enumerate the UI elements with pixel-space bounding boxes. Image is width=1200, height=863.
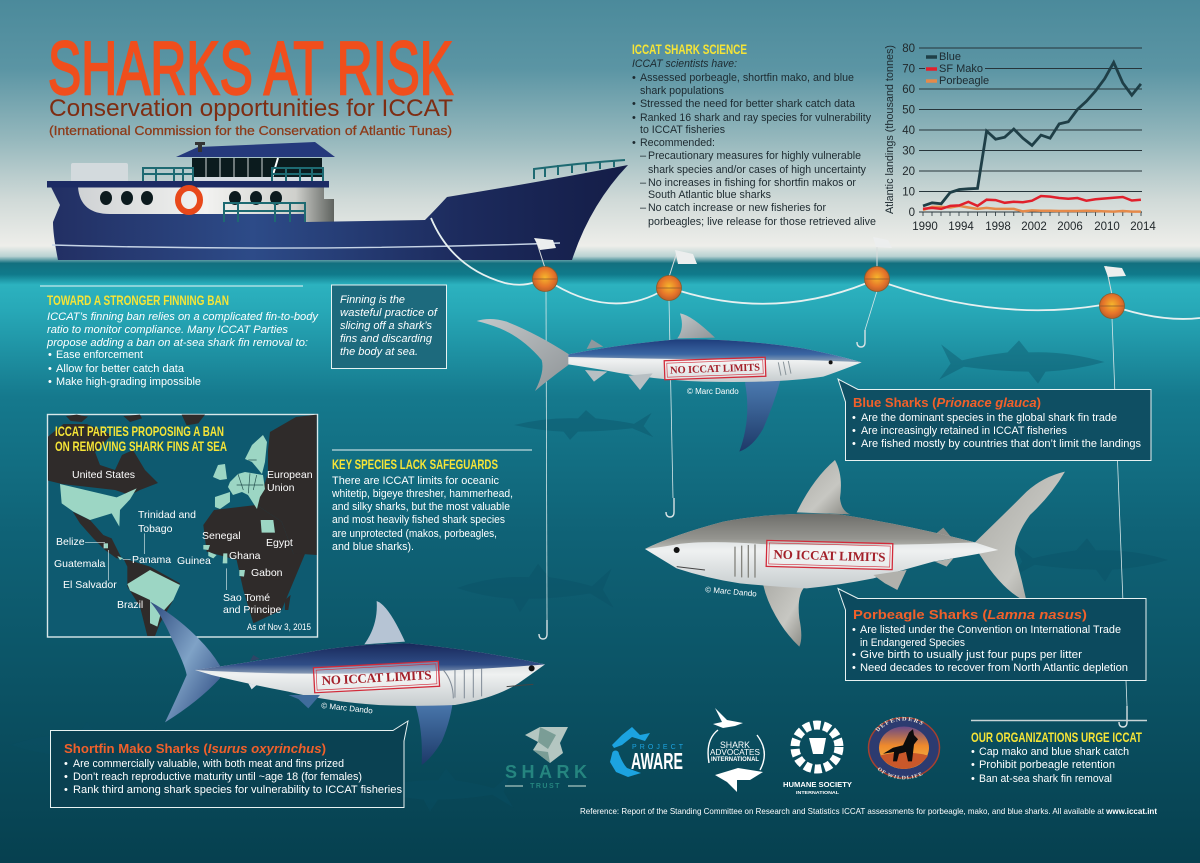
pectoral fin <box>762 575 805 647</box>
tail <box>975 472 1065 602</box>
logo: Defenders of Wildlife <box>868 716 940 780</box>
panel: map of ICCAT parties <box>48 414 318 637</box>
finning ban text: ICCAT’s finning ban relies on a complicated fin-to-body <box>47 311 320 323</box>
science text: Recommended: <box>640 137 715 149</box>
x axis labels: 2014 <box>1130 221 1156 233</box>
hull <box>51 165 628 260</box>
science text: Stressed the need for better shark catch data <box>640 98 856 110</box>
map labels: Senegal <box>202 530 241 542</box>
map heading <box>55 423 227 454</box>
finning ban text: • <box>48 363 52 375</box>
science text: porbeagles; live release for those retrieved alive <box>648 216 876 228</box>
logo: Shark Advocates International: ADVOCATES <box>710 748 760 757</box>
mouth <box>507 684 533 687</box>
commission name: (International Commission for the Conservation of Atlantic Tunas) <box>49 124 452 138</box>
panel: key species lack safeguards <box>331 450 532 553</box>
legend <box>926 51 989 87</box>
dorsal fin <box>677 313 715 338</box>
map labels: United States <box>72 469 135 481</box>
science text: – <box>640 177 647 189</box>
legend: SF Mako <box>939 63 983 75</box>
x axis labels: 2010 <box>1094 221 1120 233</box>
urge list: • <box>971 759 975 771</box>
mako facts: • <box>64 784 68 796</box>
mako facts: Don’t reach reproductive maturity until ~age 18 (for females) <box>73 771 362 783</box>
logo: Shark Trust: SHARK <box>505 762 587 782</box>
illustration: shortfin mako shark <box>150 601 545 765</box>
science text: shark species and/or cases of high uncertainty <box>648 164 866 176</box>
map labels <box>54 469 313 632</box>
blue shark facts: Are fished mostly by countries that don’t limit the landings <box>861 438 1141 450</box>
y axis labels: 10 <box>902 186 915 198</box>
branch lines <box>546 290 1127 706</box>
key species text: and silky sharks, but the most valuable <box>332 501 510 513</box>
mako facts: Rank third among shark species for vulnerability to ICCAT fisheries <box>73 784 403 796</box>
science text: • <box>632 112 636 124</box>
science text: • <box>632 72 636 84</box>
science text: ICCAT scientists have: <box>632 58 737 70</box>
lower fins <box>873 558 953 590</box>
blue shark facts: • <box>852 425 856 437</box>
science text: • <box>632 98 636 110</box>
blue shark title: Blue Sharks (Prionace glauca) <box>853 395 1041 410</box>
tail <box>477 319 570 391</box>
logo: Shark Advocates International: INTERNATIONAL <box>711 757 759 763</box>
map labels: and Principe <box>223 604 282 616</box>
stamp: no ICCAT limits: NO ICCAT LIMITS <box>321 667 432 688</box>
fishing boat <box>47 142 628 260</box>
callout: finning definition: Finning is the <box>340 294 405 306</box>
eye <box>829 360 833 364</box>
stamp: no ICCAT limits: NO ICCAT LIMITS <box>670 362 760 377</box>
map background <box>48 414 318 637</box>
science text: Precautionary measures for highly vulnerable <box>648 150 861 162</box>
panel: our organizations urge ICCAT <box>971 720 1147 785</box>
map labels: Ghana <box>229 550 261 562</box>
urge list: • <box>971 773 975 785</box>
legend: Blue <box>939 51 961 63</box>
mako facts: • <box>64 771 68 783</box>
body <box>568 339 862 382</box>
mako facts <box>64 758 403 796</box>
y axis labels <box>902 43 915 219</box>
wheelhouse <box>192 158 322 181</box>
y axis labels: 40 <box>902 125 915 137</box>
blue shark facts <box>852 412 1141 450</box>
eye <box>529 665 535 671</box>
map heading: ON REMOVING SHARK FINS AT SEA <box>55 438 227 454</box>
porbeagle facts <box>852 624 1128 674</box>
urge list <box>971 746 1129 785</box>
deck <box>47 181 329 188</box>
logo: Humane Society International: INTERNATIONAL <box>796 790 839 795</box>
second dorsal fin <box>935 528 952 538</box>
blue shark facts: Are the dominant species in the global shark fin trade <box>861 412 1117 424</box>
finning ban text: Allow for better catch data <box>56 363 185 375</box>
y axis title: Atlantic landings (thousand tonnes) <box>884 45 896 214</box>
line chart: Atlantic landings <box>884 43 1156 233</box>
proposing countries <box>60 484 137 527</box>
porbeagle facts: Need decades to recover from North Atlantic depletion <box>860 662 1128 674</box>
porbeagle title: Porbeagle Sharks ( Lamna nasus ) <box>853 607 1087 622</box>
dorsal fin <box>797 460 851 514</box>
logo: Project Aware: AWARE <box>631 748 683 774</box>
back <box>645 514 975 549</box>
map labels: Egypt <box>266 537 293 549</box>
science text: • <box>632 137 636 149</box>
science text: – <box>640 150 647 162</box>
hooks <box>539 330 1127 727</box>
callout: finning definition: slicing off a shark’s <box>340 320 432 332</box>
logo: Shark Trust: TRUST <box>530 783 561 790</box>
dorsal fin <box>364 601 405 644</box>
map land <box>48 415 317 636</box>
finning ban text <box>46 311 320 388</box>
EU borders <box>237 460 263 493</box>
science text <box>632 58 876 228</box>
back <box>195 643 545 674</box>
gills <box>443 668 482 698</box>
porbeagle facts: in Endangered Species <box>860 637 965 649</box>
series: shortfin mako <box>923 196 1141 209</box>
logo: Shark Trust <box>505 727 587 790</box>
key species text: and most heavily fished shark species <box>332 514 505 526</box>
subtitle: Conservation opportunities for ICCAT <box>49 95 453 122</box>
lower fins <box>288 695 320 708</box>
legend: Porbeagle <box>939 75 989 87</box>
panel: ICCAT shark science <box>632 41 876 228</box>
urge list: Cap mako and blue shark catch <box>979 746 1129 758</box>
porbeagle facts: • <box>852 649 856 661</box>
pectoral fin <box>739 376 782 452</box>
urge list: Prohibit porbeagle retention <box>979 759 1115 771</box>
railings <box>143 160 625 222</box>
porbeagle facts: • <box>852 624 856 636</box>
logo: Humane Society International <box>783 725 852 795</box>
x axis labels <box>912 221 1156 233</box>
flags <box>534 237 1126 295</box>
logo: Project Aware <box>610 727 684 777</box>
y axis labels: 50 <box>902 104 915 116</box>
mako title: Shortfin Mako Sharks (Isurus oxyrinchus) <box>64 741 326 756</box>
x axis labels: 1990 <box>912 221 938 233</box>
y axis labels: 60 <box>902 84 915 96</box>
map labels: Belize <box>56 536 85 548</box>
logo: Project Aware: PROJECT <box>632 744 684 751</box>
blue shark facts: • <box>852 438 856 450</box>
x axis labels: 1998 <box>985 221 1011 233</box>
funnel tank <box>71 163 128 182</box>
key species text: and blue sharks). <box>332 541 414 553</box>
finning ban text: • <box>48 376 52 388</box>
panel: toward a stronger finning ban <box>40 286 320 388</box>
x axis labels: 2006 <box>1057 221 1083 233</box>
science heading: ICCAT SHARK SCIENCE <box>632 41 747 57</box>
roof and mast <box>176 142 335 157</box>
finning ban text: • <box>48 349 52 361</box>
science text: Ranked 16 shark and ray species for vulnerability <box>640 112 871 124</box>
callout: shortfin mako sharks <box>50 721 408 808</box>
map labels: European <box>267 469 313 481</box>
logo: Humane Society International: HUMANE SOCIETY <box>783 782 852 789</box>
logo: Defenders of Wildlife: DEFENDERS <box>874 716 924 732</box>
key species heading: KEY SPECIES LACK SAFEGUARDS <box>332 456 498 472</box>
map labels: Tobago <box>138 523 173 535</box>
key species text <box>331 475 513 553</box>
key species text: whitetip, bigeye thresher, hammerhead, <box>331 488 513 500</box>
porbeagle facts: • <box>852 662 856 674</box>
y axis labels: 0 <box>909 207 915 219</box>
series: blue shark <box>923 62 1141 206</box>
lower fins <box>585 370 653 390</box>
finning ban text: Make high-grading impossible <box>56 376 201 388</box>
eye <box>674 547 680 553</box>
longline with floats and hooks <box>431 218 1200 727</box>
callout: finning definition: the body at sea. <box>340 346 418 358</box>
x axis ticks <box>923 212 1141 216</box>
map labels: Sao Tomé <box>223 592 270 604</box>
portholes <box>100 191 282 205</box>
map labels: Brazil <box>117 599 143 611</box>
urge list: • <box>971 746 975 758</box>
finning ban text: Ease enforcement <box>56 349 143 361</box>
y axis labels: 80 <box>902 43 915 55</box>
illustration: blue shark <box>477 313 862 452</box>
y axis labels: 30 <box>902 146 915 158</box>
body <box>195 643 545 706</box>
credit: © Marc Dando <box>321 701 374 715</box>
finning ban text: ratio to monitor compliance. Many ICCAT Parties <box>47 324 288 336</box>
science text: to ICCAT fisheries <box>640 124 725 136</box>
body <box>645 514 998 588</box>
map labels: Union <box>267 482 295 494</box>
map labels: El Salvador <box>63 579 117 591</box>
mako facts: • <box>64 758 68 770</box>
urge list: Ban at-sea shark fin removal <box>979 773 1112 785</box>
logo: Defenders of Wildlife: OF WILDLIFE <box>878 768 923 780</box>
back <box>568 339 862 362</box>
stamp: no ICCAT limits <box>766 540 893 570</box>
finning ban text: propose adding a ban on at-sea shark fin removal to: <box>46 337 308 349</box>
credit: © Marc Dando <box>687 387 739 396</box>
second dorsal fin <box>250 655 260 661</box>
illustration: porbeagle shark <box>645 460 1065 647</box>
x axis labels: 2002 <box>1021 221 1047 233</box>
logo: Shark Advocates International <box>708 708 764 792</box>
callout: finning definition: wasteful practice of <box>340 307 438 319</box>
y axis labels: 20 <box>902 166 915 178</box>
white cabin <box>78 187 334 222</box>
key species text: There are ICCAT limits for oceanic <box>332 475 499 487</box>
credit: © Marc Dando <box>705 585 758 599</box>
callout: porbeagle sharks <box>838 588 1146 680</box>
tail <box>150 602 220 722</box>
science text: – <box>640 202 647 214</box>
logo: Shark Advocates International: SHARK <box>720 740 750 750</box>
blue shark facts: Are increasingly retained in ICCAT fisheries <box>861 425 1067 437</box>
science text: No increases in fishing for shortfin makos or <box>648 177 856 189</box>
key species text: are unprotected (makos, porbeagles, <box>332 528 497 540</box>
mouth <box>677 567 705 570</box>
blue shark facts: • <box>852 412 856 424</box>
map labels: Trinidad and <box>138 509 196 521</box>
science text: Assessed porbeagle, shortfin mako, and blue <box>640 72 854 84</box>
finning ban heading: TOWARD A STRONGER FINNING BAN <box>47 292 229 308</box>
mako facts: Are commercially valuable, with both meat and fins prized <box>73 758 344 770</box>
map labels: Gabon <box>251 567 283 579</box>
porbeagle facts: Give birth to usually just four pups per litter <box>860 649 1082 661</box>
callout: finning definition <box>332 285 446 368</box>
background shark silhouettes <box>10 340 1168 812</box>
gills <box>735 544 755 578</box>
gills <box>778 361 791 376</box>
map labels: Guatemala <box>54 558 106 570</box>
reference line: Reference: Report of the Standing Committee on Research and Statistics ICCAT assessments for porbeagle, mako, and blue sharks. All available at www.iccat.int <box>580 806 1157 816</box>
science text: No catch increase or new fisheries for <box>648 202 826 214</box>
series: porbeagle <box>923 206 1141 212</box>
porbeagle facts: Are listed under the Convention on International Trade <box>860 624 1121 636</box>
title block <box>48 26 453 138</box>
life ring <box>178 188 200 212</box>
map labels: Panama <box>132 554 171 566</box>
grid lines <box>919 48 1142 212</box>
floats <box>532 266 1124 318</box>
map heading: ICCAT PARTIES PROPOSING A BAN <box>55 423 224 439</box>
leader lines <box>85 533 227 590</box>
x axis labels: 1994 <box>948 221 974 233</box>
callout: finning definition: fins and discarding <box>340 333 433 345</box>
science text: South Atlantic blue sharks <box>648 189 771 201</box>
science text: shark populations <box>640 85 724 97</box>
main title: SHARKS AT RISK <box>48 26 453 110</box>
second dorsal fin <box>587 339 603 349</box>
pectoral fin <box>414 696 453 765</box>
stamp: no ICCAT limits: NO ICCAT LIMITS <box>773 547 886 564</box>
y axis labels: 70 <box>902 64 915 76</box>
callout: blue sharks <box>838 379 1151 460</box>
main line <box>431 218 1200 319</box>
stamp: no ICCAT limits <box>313 661 440 693</box>
stamp: no ICCAT limits <box>664 357 766 380</box>
map labels: Guinea <box>177 555 211 567</box>
map labels: As of Nov 3, 2015 <box>247 622 311 632</box>
